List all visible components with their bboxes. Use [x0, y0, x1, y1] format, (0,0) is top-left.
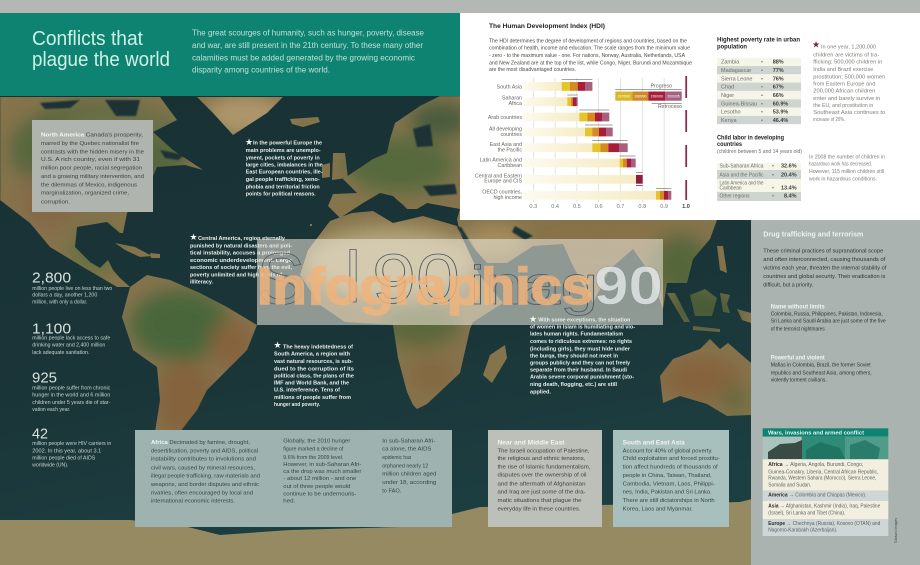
- callout: women in Islam: of women in Islam is humiliating and vio-: [530, 325, 635, 331]
- intro text: calamities must be added generated by the growing economic: [192, 53, 415, 62]
- photo strip: [763, 437, 888, 459]
- Africa text column 1: illegal people trafficking, raw materials and: [151, 474, 260, 480]
- watermark outlined text: inag: [470, 254, 598, 316]
- callout: women in Islam: groups publicly and they can not freely: [530, 361, 631, 367]
- panel: Near and Middle East: [488, 430, 602, 527]
- panel: North America: U.S. A rich country, even if with 31: [41, 157, 140, 163]
- callout: Europe: large cities, imbalances in the: [246, 162, 323, 168]
- HDI legend: 2000/05: [667, 94, 680, 98]
- panel: South and East Asia: South and East Asia: [623, 440, 685, 446]
- stat: 925: children under 5 years die of star-: [32, 400, 111, 406]
- panel: North America: the dilemmas of Mexico, indigenous: [41, 183, 137, 189]
- watermark banner: [257, 238, 663, 325]
- paragraph: These criminal practices of supranational scope: [763, 249, 883, 255]
- callout: South America: South America, a region with: [274, 352, 351, 358]
- icon: crimson star: ★: [812, 40, 820, 50]
- panel: Near and Middle East: disputes over the ownership of oil: [498, 473, 586, 479]
- watermark outlined text: 90: [372, 240, 460, 318]
- callout: Central America: economic underdevelopment. Large: [190, 258, 292, 264]
- Africa text column 3: In sub-Saharan Afri-: [382, 438, 435, 444]
- table: highest poverty rate: [717, 38, 801, 124]
- stat: 2,800: dollars a day, another 1,200: [32, 292, 98, 298]
- stat: 42: million people were HIV carriers in: [32, 441, 112, 447]
- HDI axis labels: [529, 204, 690, 210]
- paragraph: victims each year, threaten the internal stability of: [763, 266, 887, 272]
- HDI legend: Retroceso: [658, 104, 682, 110]
- stat: 2,800: [32, 270, 113, 305]
- Africa text column 3: ca alone, the AIDS: [382, 447, 431, 453]
- Africa text column 2: [283, 438, 361, 505]
- callout: South America: hunger and poverty.: [274, 402, 320, 408]
- row: Central and Eastern Europe and CIS: Central and Eastern: [475, 173, 522, 179]
- panel: Near and Middle East: matic situations that plague the: [498, 498, 582, 504]
- Africa text column 2: 9.6% from the 2009 level.: [283, 455, 344, 461]
- callout: Central America: [190, 233, 292, 285]
- panel: Near and Middle East: and Iraq are just some of the dra-: [498, 490, 586, 496]
- HDI description: combination of health, income and education. The scale ranges from the minimum value: [489, 46, 690, 52]
- table: highest poverty rate: •: [761, 68, 763, 74]
- panel: North America: North America Canada's prosperity,: [41, 133, 143, 139]
- text: child trafficking note: the EU, and prostitution in: [813, 103, 873, 109]
- callout: women in Islam: With some exceptions, the situation: [538, 318, 631, 324]
- Africa text column 3: epidemic has: [382, 455, 411, 461]
- box: wars, invasions and armed conflict: Asia → Afghanistan, Kashmir (India), Iraq, Palestine: [768, 504, 880, 510]
- HDI axis labels: 1.0: [682, 204, 690, 210]
- watermark outlined text: [257, 238, 598, 320]
- row: Latin America and Caribbean: Caribbean: [498, 163, 522, 169]
- Africa text column 2: hed.: [283, 499, 296, 505]
- panel: South and East Asia: Child exploitation and forced prostitu-: [623, 456, 720, 462]
- panel: Near and Middle East: Near and Middle East: [498, 440, 564, 446]
- stat: 42: million people died of AIDS: [32, 455, 96, 461]
- stat: 925: vation each year.: [32, 407, 70, 413]
- stat: 1,100: drinking water and 2,400 million: [32, 343, 106, 349]
- panel: title header: [0, 13, 460, 96]
- sub-block: Powerful and violent: Mafias in Colombia, Brazil, the former Soviet: [771, 363, 871, 369]
- panel: North America: corruption.: [41, 199, 70, 205]
- box: wars, invasions and armed conflict: Africa → Algeria, Angola, Burundi, Congo,: [768, 462, 863, 468]
- table: child labor: •: [772, 186, 774, 192]
- Africa text column 3: [382, 438, 436, 494]
- sub-block: Name without limits: Sri Lanka and Saudi Arabia are just some of the five: [771, 319, 886, 325]
- sub-block: Powerful and violent: [771, 356, 872, 383]
- table: highest poverty rate: •: [761, 118, 763, 124]
- panel: Africa: [135, 430, 452, 527]
- row: East Asia and the Pacific: East Asia and: [490, 142, 522, 148]
- row: East Asia and the Pacific: [490, 140, 628, 154]
- HDI axis labels: 0.3: [529, 204, 537, 210]
- row: Central and Eastern Europe and CIS: Europe and CIS: [484, 178, 522, 184]
- table: highest poverty rate: •: [761, 60, 763, 66]
- text: child trafficking note: enter and barely survive in: [813, 96, 880, 102]
- table: child labor: Latin America and the: [720, 180, 764, 186]
- paragraph: and often interconnected, causing thousands of: [763, 257, 886, 263]
- stat: 925: million people suffer from chronic: [32, 385, 111, 391]
- box: wars, invasions and armed conflict: Europe → Chechnya (Russia), Kosovo (OTAN) and: [768, 521, 880, 527]
- HDI description: The HDI determines the degree of development of regions and countries, based on the: [489, 38, 687, 44]
- table: child labor: •: [772, 194, 774, 200]
- watermark number: 90: [594, 256, 663, 316]
- callout: women in Islam: the burqa, they should not meet in: [530, 353, 618, 359]
- stat: 42: [32, 425, 112, 469]
- table: child labor: Caribbean: [720, 186, 742, 192]
- callout: South America: IMF and World Bank, and the: [274, 381, 349, 387]
- callout: South America: The heavy indebtedness of: [283, 344, 353, 350]
- callout: women in Islam: ning death, flogging, etc.) are still: [530, 382, 617, 388]
- stat: 42: 2002. In this year, about 3.1: [32, 448, 102, 454]
- callout: Europe: East European countries, ille-: [246, 170, 323, 176]
- Africa text column 2: ca the drop was much smaller: [283, 469, 361, 475]
- text: hazardous work note: However, 115 million children still: [809, 169, 884, 175]
- table: highest poverty rate: •: [761, 85, 763, 91]
- callout: Europe: main problems are unemplo-: [246, 148, 321, 154]
- callout: Central America: punished by natural disasters and poli-: [190, 243, 292, 249]
- panel: South and East Asia: nes, India, Pakistan and Sri Lanka.: [623, 490, 712, 496]
- Africa text column 1: instability contributes to involutions and: [151, 457, 256, 463]
- row: Saharan Africa: Africa: [508, 101, 522, 107]
- row: OECD countries, high income: OECD countries,: [482, 190, 522, 196]
- text: hazardous work note: hazardous work has decreased.: [809, 162, 872, 168]
- HDI axis labels: 0.5: [573, 204, 581, 210]
- callout: Europe: phobia and territorial friction: [246, 184, 320, 190]
- row: Saharan Africa: Saharan: [502, 95, 522, 101]
- table: highest poverty rate: 88%: [773, 60, 784, 66]
- callout: Central America: poverty unlimited and high levels of: [190, 272, 282, 278]
- text: child trafficking note: increase of 20%.: [813, 117, 846, 123]
- table: highest poverty rate: Lesotho: [721, 110, 741, 116]
- HDI description: [489, 38, 692, 73]
- table: child labor: 8.4%: [784, 194, 797, 200]
- stat: 42: 42: [32, 425, 48, 442]
- box: wars, invasions and armed conflict: (Israel), Sri Lanka and Tibet (China).: [768, 511, 845, 517]
- HDI axis labels: 0.8: [638, 204, 646, 210]
- table: highest poverty rate: •: [761, 93, 763, 99]
- statistics column: [32, 270, 113, 469]
- text: child trafficking note: children are victims of tra-: [813, 52, 879, 58]
- box: wars, invasions and armed conflict: Wars, invasions and armed conflict: [768, 431, 864, 437]
- callout: South America: dued to the corruption of its: [274, 366, 354, 372]
- table: highest poverty rate: Highest poverty rate in urban: [717, 38, 800, 44]
- panel: North America: marred by the Quebec nationalist fire: [41, 141, 139, 147]
- HDI axis labels: 0.4: [551, 204, 559, 210]
- text: hazardous work note: In 2008 the number of children in: [809, 155, 885, 161]
- stat: 2,800: million, with only a dollar.: [32, 299, 87, 305]
- Africa text column 2: However, in sub-Saharan Afri-: [283, 462, 361, 468]
- box: wars, invasions and armed conflict: Rwanda, Western Sahara (Morocco), Sierra Leone,: [768, 476, 876, 482]
- callout: women in Islam: [529, 315, 635, 395]
- text: child trafficking note: from Eastern Europe and: [813, 82, 875, 88]
- row: All developing countries: [489, 125, 613, 138]
- intro text: disparity among countries of the world.: [192, 66, 330, 75]
- table: highest poverty rate: •: [761, 110, 763, 116]
- sub-block: Name without limits: Colombia, Russia, Philippines, Pakistan, Indonesia,: [771, 312, 883, 318]
- row: Arab countries: [488, 110, 609, 121]
- stat: 1,100: 1,100: [32, 320, 71, 337]
- panel: Near and Middle East: and the aftermath of Afghanistan: [498, 481, 586, 487]
- panel: South and East Asia: Cambodia, Vietnam, Laos, Philippi-: [623, 481, 715, 487]
- table: highest poverty rate: Niger: [721, 93, 734, 99]
- heading: Drug trafficking and terrorism: [763, 232, 863, 239]
- callout: South America: ★: [274, 341, 282, 351]
- callout: South America: millions of people suffer from: [274, 395, 351, 401]
- HDI description: - zero - to the maximum value - one. For nations, Norway, Australia, Netherlands, USA: [489, 53, 685, 59]
- callout: Europe: gal people trafficking, xeno-: [246, 177, 320, 183]
- intro text: The great scourges of humanity, such as hunger, poverty, disease: [192, 29, 425, 38]
- Africa text column 1: rivalries, often encouraged by local and: [151, 490, 253, 496]
- stat: 925: 925: [32, 369, 57, 386]
- callout: Central America: illiteracy.: [190, 279, 213, 285]
- panel: North America: marginalization, organized crime,: [41, 191, 129, 197]
- text: hazardous work note: work in hazardous conditions.: [808, 176, 877, 182]
- Africa text column 1: international economic interests.: [151, 498, 235, 504]
- table: highest poverty rate: Madagascar: [721, 68, 751, 74]
- text: child trafficking note: [812, 40, 885, 123]
- table: child labor: •: [772, 164, 774, 170]
- watermark outlined text: l: [345, 238, 361, 318]
- callout: Europe: ★: [245, 138, 253, 148]
- callout: Europe: [245, 138, 323, 197]
- row: OECD countries, high income: high income: [493, 195, 522, 201]
- row: Arab countries: Arab countries: [488, 115, 522, 121]
- HDI description: and New Zealand are at the top of the list, while Congo, Niger, Burundi and Mozambique: [489, 60, 692, 66]
- table: highest poverty rate: 53.9%: [773, 110, 788, 116]
- callout: women in Islam: applied.: [530, 389, 551, 395]
- sub-block: Name without limits: Name without limits: [771, 305, 825, 311]
- HDI legend: 1990/00: [651, 94, 663, 98]
- intro text: [192, 29, 425, 75]
- panel: Near and Middle East: the rise of Islamic fundamentalism,: [498, 465, 591, 471]
- box: wars, invasions and armed conflict: Somalia and Sudan.: [768, 482, 811, 488]
- text: child trafficking note: In one year, 1,200,000: [821, 45, 876, 51]
- intro text: and war, are still present in the 21th century. To these many other: [192, 41, 423, 50]
- callout: Central America: ★: [190, 233, 198, 243]
- paragraph: countries and global security. Their eradication is: [763, 274, 885, 280]
- table: highest poverty rate: 67%: [773, 85, 784, 91]
- table: child labor: Child labor in developing: [717, 135, 784, 141]
- row: Latin America and Caribbean: Latin America and: [480, 158, 522, 164]
- title: [32, 28, 170, 71]
- stat: 2,800: million people live on less than two: [32, 286, 113, 292]
- HDI heading: The Human Development Index (HDI): [489, 23, 605, 30]
- table: highest poverty rate: population: [717, 44, 747, 50]
- text: hazardous work note: [808, 155, 885, 182]
- panel: South and East Asia: Account for 40% of global poverty.: [623, 449, 713, 455]
- panel: South and East Asia: tion affect hundreds of thousands of: [623, 465, 718, 471]
- watermark outlined text: S: [257, 240, 305, 320]
- panel: Near and Middle East: The Israeli occupation of Palestine,: [498, 449, 590, 455]
- callout: Europe: In the powerful Europe the: [253, 141, 322, 147]
- title: plague the world: [32, 49, 170, 71]
- HDI bar chart: [475, 76, 690, 210]
- table: highest poverty rate: Chad: [721, 85, 734, 91]
- HDI legend: Progreso: [650, 84, 672, 90]
- callout: women in Islam: separate from their husband. In Saudi: [530, 368, 627, 374]
- panel: North America: [32, 120, 153, 212]
- row: OECD countries, high income: [482, 188, 671, 201]
- table: highest poverty rate: •: [761, 76, 763, 82]
- panel: white statistics panel: [460, 13, 920, 220]
- HDI description: are the most disadvantaged countries.: [489, 67, 576, 73]
- panel: Near and Middle East: everyday life in these countries.: [498, 507, 581, 513]
- HDI legend: [615, 84, 682, 110]
- HDI legend: 1980/90: [634, 94, 647, 98]
- panel: South and East Asia: There are still dictatorships in North: [623, 498, 715, 504]
- panel: Near and Middle East: the religious and ethnic tensions,: [498, 456, 586, 462]
- row: Latin America and Caribbean: [480, 156, 636, 169]
- table: highest poverty rate: Guinea-Bissau: [721, 101, 757, 107]
- Africa text column 2: Globally, the 2010 hunger: [283, 438, 350, 444]
- watermark orange text: Infographics: [257, 258, 593, 316]
- box: wars, invasions and armed conflict: America → Colombia and Chiapas (Mexico).: [768, 493, 866, 499]
- callout: women in Islam: comes to ridiculous extremes: no rights: [530, 339, 632, 345]
- row: Central and Eastern Europe and CIS: [475, 172, 643, 186]
- stat: 1,100: million people lack access to safe: [32, 336, 111, 342]
- callout: Central America: tical instability, accuses a prolonged: [190, 251, 291, 257]
- callout: Central America: Central America, region eternally: [198, 236, 286, 242]
- paragraph: difficult, but a priority.: [763, 283, 814, 289]
- row: East Asia and the Pacific: the Pacific: [498, 148, 522, 154]
- callout: South America: U.S. interference. Tens of: [274, 388, 340, 394]
- box: wars, invasions and armed conflict: Nagorno-Karabakh (Azerbaijan).: [768, 528, 837, 534]
- world map background: [0, 95, 752, 565]
- Africa text column 3: orphaned nearly 12: [382, 463, 428, 469]
- table: child labor: [717, 135, 802, 201]
- text: child trafficking note: India and Brazil exercise: [813, 67, 873, 73]
- table: child labor: Asia and the Pacific: [720, 172, 764, 178]
- stat: 2,800: 2,800: [32, 270, 71, 287]
- table: highest poverty rate: 60.9%: [773, 101, 788, 107]
- callout: women in Islam: Arabia severe corporal punishment (sto-: [530, 375, 634, 381]
- table: highest poverty rate: •: [761, 101, 763, 107]
- HDI axis labels: 0.9: [660, 204, 668, 210]
- callout: Europe: yment, pockets of poverty in: [246, 155, 320, 161]
- text: child trafficking note: 200,000 African children: [813, 89, 875, 95]
- table: highest poverty rate: Kenya: [721, 118, 738, 124]
- box: wars, invasions and armed conflict: [763, 428, 888, 536]
- box: wars, invasions and armed conflict: Guinea-Conakry, Liberia, Central African Republic,: [768, 469, 878, 475]
- table: child labor: •: [772, 172, 774, 178]
- table: highest poverty rate: 66%: [773, 93, 784, 99]
- text: child trafficking note: Southeast Asia continues to: [813, 110, 885, 116]
- Africa text column 3: million children aged: [382, 472, 436, 478]
- text: child trafficking note: fficking: 500,000 children in: [813, 60, 882, 66]
- stat: 925: hunger in the world and 6 million: [32, 393, 111, 399]
- Africa text column 3: under 18, according: [382, 480, 436, 486]
- sub-block: Powerful and violent: Powerful and violent: [771, 356, 825, 362]
- sub-block: Name without limits: of the terrorist nightmares: [771, 326, 825, 332]
- top grey band: [0, 0, 920, 13]
- table: highest poverty rate: 46.4%: [773, 118, 788, 124]
- panel: South and East Asia: Korea, Laos and Myanmar.: [623, 506, 693, 512]
- sub-block: Powerful and violent: republics and Southeast Asia, among others,: [771, 370, 872, 376]
- HDI axis labels: 0.7: [617, 204, 624, 210]
- row: Saharan Africa: [502, 95, 578, 107]
- Africa text column 1: weapons, and border disputes and ethnic: [150, 482, 259, 488]
- table: child labor: countries: [717, 142, 743, 148]
- Africa text column 2: figure marked a decline of: [283, 446, 344, 452]
- Africa text column 1: civil wars, caused by mineral resources,: [151, 465, 255, 471]
- sub-block: Powerful and violent: violently torment civilians.: [771, 377, 827, 383]
- panel: South and East Asia: [613, 430, 729, 527]
- table: highest poverty rate: Zambia: [721, 60, 740, 66]
- Africa text column 1: [150, 440, 260, 504]
- panel: Human Development Index: [475, 23, 692, 210]
- text: child trafficking note: prostitution; 500,000 women: [813, 74, 885, 80]
- table: child labor: (children between 5 and 14 years old): [717, 149, 802, 155]
- Africa text column 2: - about 12 million - and one: [283, 476, 356, 482]
- stat: 925: [32, 369, 111, 413]
- table: child labor: 13.4%: [781, 186, 797, 192]
- callout: Central America: sections of society suffer from the evil,: [190, 265, 292, 271]
- sub-block: Name without limits: [771, 305, 886, 332]
- row: South Asia: South Asia: [497, 84, 522, 90]
- callout: women in Islam: (including girls), they must hide under: [530, 346, 631, 352]
- callout: South America: [274, 341, 354, 408]
- table: highest poverty rate: Sierra Leone: [721, 76, 752, 82]
- row: South Asia: [497, 80, 592, 91]
- table: child labor: 20.4%: [781, 172, 797, 178]
- callout: Europe: points for political reasons.: [246, 191, 316, 197]
- callout: South America: vast natural resources, is sub-: [274, 359, 353, 365]
- panel: North America: million poor people, racial segregation: [41, 165, 142, 171]
- table: child labor: Sub-Saharan Africa: [720, 164, 764, 170]
- title: Conflicts that: [32, 28, 143, 50]
- table: highest poverty rate: 77%: [773, 68, 784, 74]
- panel: South and East Asia: people in China, Taiwan, Thailand,: [623, 473, 712, 479]
- stat: 42: worldwide (UN).: [32, 463, 68, 469]
- row: All developing countries: All developing: [489, 127, 522, 133]
- HDI legend: 1975/80: [618, 94, 630, 98]
- Africa text column 2: out of three people would: [283, 484, 350, 490]
- panel: drug trafficking and terrorism: [751, 220, 920, 565]
- row: All developing countries: countries: [500, 132, 522, 138]
- callout: South America: political class, the plans of the: [274, 374, 354, 380]
- stat: 1,100: [32, 320, 111, 356]
- Africa text column 2: continue to be undernouris-: [283, 492, 356, 498]
- Antarctica band: [0, 499, 752, 565]
- HDI axis labels: 0.6: [595, 204, 603, 210]
- table: child labor: Other regions: [720, 194, 750, 200]
- panel: North America: and a growing military intervention, and: [41, 174, 144, 180]
- table: highest poverty rate: 76%: [773, 76, 784, 82]
- callout: women in Islam: ★: [529, 315, 537, 325]
- stat: 1,100: lack adequate sanitation.: [32, 350, 89, 356]
- panel: North America: contrasts with the hidden misery in the: [41, 149, 144, 155]
- table: child labor: 32.6%: [781, 164, 797, 170]
- Africa text column 1: Africa Decimated by famine, drought,: [151, 440, 250, 446]
- paragraph: [763, 249, 887, 289]
- credit: ©Arturo Images: [894, 518, 898, 543]
- Africa text column 3: to FAO.: [382, 488, 402, 494]
- Africa text column 1: desertification, poverty and AIDS, political: [151, 449, 258, 455]
- callout: women in Islam: lates human rights. Fundamentalism: [530, 332, 623, 338]
